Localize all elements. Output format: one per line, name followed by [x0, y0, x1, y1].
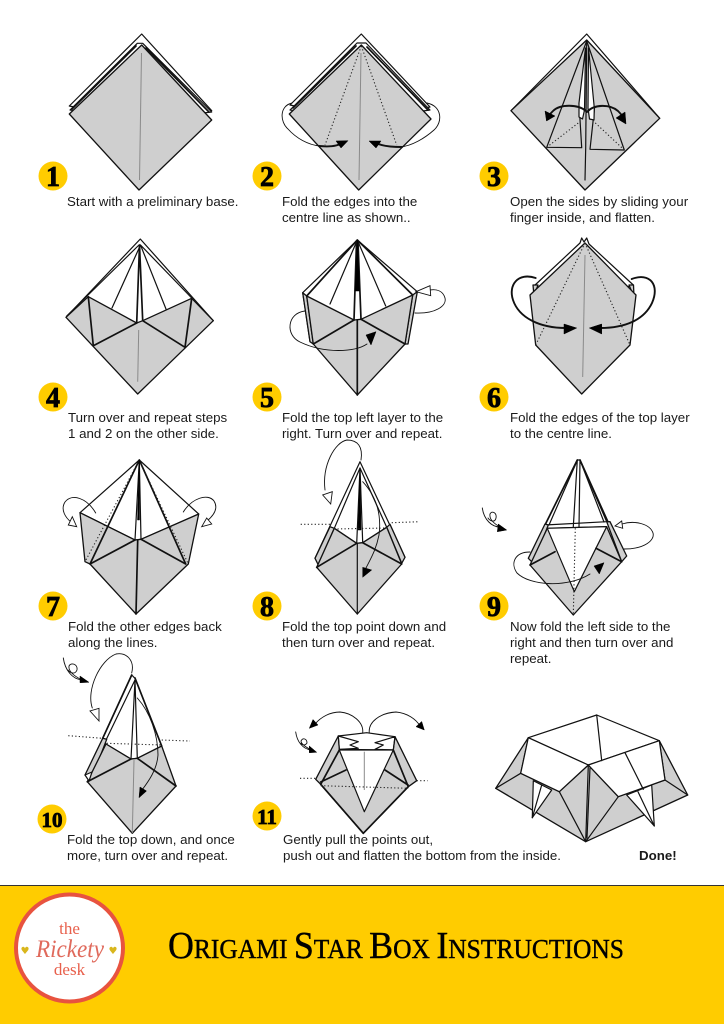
arrow: top point down-left — [325, 440, 361, 490]
caption: step 2: centre line as shown.. — [282, 210, 411, 225]
logo: the rickety desk — [16, 894, 123, 1002]
caption: step 9: repeat. — [510, 651, 551, 666]
caption: step 11: Gently pull the points out, — [283, 832, 433, 847]
logo: the rickety desk: desk — [54, 960, 86, 979]
diagram: fold edges to centre — [282, 34, 440, 190]
arrow: back fold — [415, 290, 445, 313]
arrow: right back fold — [622, 522, 653, 549]
caption: step 8: Fold the top point down and — [282, 619, 446, 634]
arrow: open left — [548, 106, 586, 119]
badge: number 1 — [38, 162, 68, 193]
panel: step 9 — [480, 460, 673, 666]
caption: step 6: to the centre line. — [510, 426, 612, 441]
caption: step 4: Turn over and repeat steps — [68, 410, 228, 425]
arrow: down fold — [363, 482, 380, 568]
badge: number 5: 5 — [260, 383, 274, 414]
badge: number 8: 8 — [260, 592, 274, 623]
badge: number 10: 10 — [42, 808, 62, 832]
caption: step 3: Open the sides by sliding your — [510, 194, 689, 209]
caption: step 9: right and then turn over and — [510, 635, 673, 650]
badge: number 4 — [38, 382, 68, 414]
caption: done: Done! — [639, 848, 677, 863]
arrow: left back fold — [63, 498, 96, 522]
diagram: fold top down — [63, 654, 190, 833]
badge: number 7: 7 — [46, 592, 60, 623]
panel: step 6 — [480, 238, 690, 441]
diagram: open the sides — [511, 34, 660, 190]
arrow: left fold — [282, 103, 343, 146]
icon: right heart: ♥ — [109, 946, 118, 957]
panel: step 1 — [38, 34, 238, 209]
badge: number 9 — [480, 592, 508, 623]
arrow: rotate symbol — [296, 732, 311, 750]
caption: step 1: Start with a preliminary base. — [67, 194, 238, 209]
badge: number 11: 11 — [257, 805, 277, 829]
caption: step 10: Fold the top down, and once — [67, 832, 235, 847]
arrow: right fold — [375, 103, 440, 147]
caption: step 5: right. Turn over and repeat. — [282, 426, 442, 441]
diagram: fold top layer edges — [512, 238, 655, 394]
arrow: pull right — [369, 712, 420, 733]
badge: number 4: 4 — [46, 383, 60, 414]
panel: step 10 — [38, 654, 235, 863]
diagram: turned over — [66, 239, 213, 394]
caption: step 7: along the lines. — [68, 635, 157, 650]
panel: step 7 — [38, 460, 222, 650]
badge: number 7 — [38, 592, 68, 623]
badge: number 9: 9 — [487, 592, 501, 623]
arrow: rotate symbol — [482, 508, 500, 527]
diagram: preliminary base — [69, 34, 212, 190]
title: ORIGAMI STAR BOX INSTRUCTIONS — [168, 925, 624, 967]
arrow: top fold over — [91, 654, 132, 708]
caption: step 8: then turn over and repeat. — [282, 635, 435, 650]
arrow: right back fold — [183, 497, 216, 521]
panel: footer banner — [0, 885, 724, 1024]
caption: step 5: Fold the top left layer to the — [282, 410, 443, 425]
logo: the rickety desk: the — [59, 919, 80, 938]
diagram: fold other edges back — [63, 460, 216, 614]
arrow: down fold — [137, 698, 158, 790]
badge: number 8 — [252, 592, 282, 623]
panel: step 8 — [252, 440, 446, 650]
badge: number 6 — [480, 382, 508, 414]
caption: step 4: 1 and 2 on the other side. — [68, 426, 219, 441]
caption: step 7: Fold the other edges back — [68, 619, 222, 634]
badge: number 11 — [252, 802, 282, 830]
badge: number 2: 2 — [260, 162, 274, 193]
badge: number 10 — [38, 804, 66, 834]
icon: left heart: ♥ — [21, 946, 30, 957]
panel: step 5 — [252, 240, 445, 441]
panel: step 3 — [480, 34, 689, 225]
arrow: right edge — [600, 277, 655, 328]
diagram: fold top point down — [301, 440, 419, 614]
caption: step 11: push out and flatten the bottom from the inside. — [283, 848, 561, 863]
badge: number 2 — [252, 162, 282, 193]
panel: step 11 — [252, 712, 561, 863]
diagram: fold left side to right — [482, 460, 653, 615]
panel: step 2 — [252, 34, 440, 225]
caption: step 6: Fold the edges of the top layer — [510, 410, 690, 425]
badge: number 1: 1 — [46, 162, 60, 193]
caption: step 9: Now fold the left side to the — [510, 619, 670, 634]
caption: step 3: finger inside, and flatten. — [510, 210, 655, 225]
diagram: fold top left layer — [290, 240, 445, 395]
arrow: left edge — [512, 277, 566, 328]
caption: step 10: more, turn over and repeat. — [67, 848, 228, 863]
arrow: left to right — [514, 552, 590, 584]
arrow: left to right — [290, 311, 367, 350]
arrow: rotate symbol — [63, 658, 82, 680]
panel: step 4 — [38, 239, 228, 441]
caption: step 2: Fold the edges into the — [282, 194, 417, 209]
arrow: open right — [587, 106, 624, 119]
badge: number 5 — [252, 382, 282, 414]
badge: number 3: 3 — [487, 162, 501, 193]
diagram: finished box — [496, 715, 688, 842]
badge: number 6: 6 — [487, 383, 501, 414]
arrow: pull left — [315, 712, 363, 733]
badge: number 3 — [480, 162, 508, 193]
diagram: pull points out — [296, 712, 428, 833]
logo: the rickety desk: Rickety — [35, 936, 105, 963]
panel: finished star box — [496, 715, 688, 863]
